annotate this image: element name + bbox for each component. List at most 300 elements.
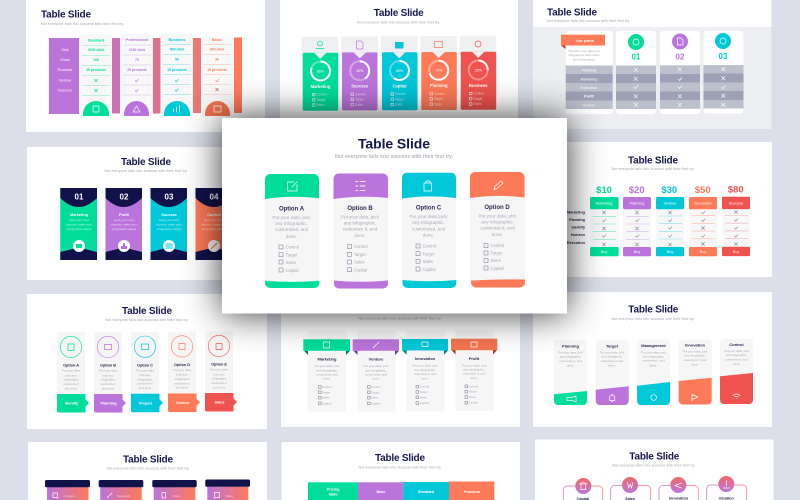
option c card: Sales	[422, 259, 433, 264]
column: business: Control	[474, 92, 484, 96]
card: venture: Control	[371, 385, 381, 389]
option c card: customized, and	[412, 226, 446, 231]
subtitle: Not everyone falls into success with their first try.	[547, 19, 630, 23]
subtitle: Not everyone falls into success with their first try.	[41, 22, 124, 26]
plans card: Planning	[582, 68, 596, 72]
column 3: Data	[173, 494, 180, 498]
card 02	[106, 188, 142, 260]
option c card: any infographic,	[412, 220, 445, 225]
plan: professional: 20 products	[127, 68, 147, 72]
card 04: Apply your best	[204, 218, 225, 222]
option b: and done	[102, 386, 115, 390]
subtitle: Not everyone falls into success with their first try.	[612, 317, 695, 321]
option e: pick any	[213, 372, 225, 376]
option c card: Target	[422, 251, 435, 256]
column: $50	[689, 185, 717, 256]
column 2	[99, 480, 143, 500]
header: standard: Standard	[418, 490, 435, 494]
card: target: Put your data, pick	[600, 351, 625, 355]
column: success: Control	[355, 92, 366, 96]
plan: business: 15 products	[167, 68, 187, 72]
row label column: Venture	[59, 78, 71, 82]
card: planning: Planning	[562, 344, 580, 348]
card: innovation: Sales	[420, 395, 428, 399]
card 03: infographic unique	[157, 227, 182, 231]
card 04: 04	[210, 192, 219, 202]
column 4	[205, 480, 250, 500]
option a card: Sales	[286, 260, 296, 265]
column: $20: Planning	[630, 202, 644, 206]
row label column: Email	[60, 58, 70, 62]
option d: pick any	[176, 373, 188, 377]
option a: Put your data	[62, 369, 80, 373]
plan: professional	[121, 34, 153, 116]
card: management: done.	[650, 363, 657, 367]
card: management: Management	[641, 343, 666, 348]
card 04: infographic unique	[202, 227, 227, 231]
column: planning: Control	[434, 92, 445, 96]
option d: customize it	[174, 381, 190, 385]
option a card: Capital	[286, 268, 299, 273]
option c card: Put your data, pick	[409, 214, 448, 219]
option c card	[402, 173, 456, 288]
card: marketing: any infographic,	[316, 368, 338, 372]
panel: gradient rows slide, bottom left	[28, 442, 267, 500]
option a card: customized, and	[275, 227, 309, 232]
column: $80	[722, 184, 750, 256]
card 03: Success	[161, 213, 177, 217]
option a card: Target	[286, 252, 298, 257]
header: premium	[449, 482, 494, 500]
panel: our plans slide, top right	[533, 0, 772, 129]
column: capital: Sales	[395, 103, 403, 107]
option d card: Target	[490, 250, 503, 256]
option d card: Capital	[490, 266, 504, 271]
card: ideation	[707, 476, 747, 500]
card: marketing: Sales	[322, 396, 330, 400]
option a: customize it	[63, 382, 79, 386]
column: capital: 60%	[396, 69, 404, 73]
plan: professional: Professional	[126, 38, 148, 42]
panel: pricing header slide, bottom centre	[282, 442, 520, 500]
card: capital	[563, 478, 603, 500]
connecting bars	[112, 38, 242, 114]
title: Table Slide	[122, 306, 172, 317]
column 2: Research	[117, 494, 130, 498]
card 02: skyeicto make your	[111, 222, 137, 226]
option a	[57, 332, 89, 412]
plan: business	[161, 34, 193, 116]
option b card	[334, 174, 388, 288]
plan: basic: 30	[215, 58, 219, 62]
option a: infographic	[64, 378, 79, 382]
option a card: Option A	[279, 206, 305, 212]
plan 02: 02	[676, 52, 685, 61]
option d: Put your data	[173, 368, 191, 372]
column: $20: Buy	[634, 250, 640, 254]
title: Table Slide	[628, 305, 679, 316]
card: profit: Control	[468, 384, 479, 388]
option c: Put your data	[136, 368, 154, 372]
option d card	[470, 172, 525, 288]
title: Table Slide	[375, 453, 425, 464]
plan: standard: 30 products	[86, 68, 106, 72]
option c card: Control	[422, 244, 436, 248]
column: marketing: Marketing	[311, 84, 331, 89]
title: Table Slide	[375, 304, 425, 316]
row label column	[49, 38, 79, 114]
option e: Sales	[215, 400, 224, 404]
card: marketing	[303, 330, 350, 412]
card: management: Put your data, pick	[641, 350, 666, 354]
column: $10: Buy	[601, 250, 607, 254]
card: planning: customize it, and	[559, 359, 582, 363]
option b: Planning	[100, 402, 117, 406]
option d card: any infographic,	[481, 220, 514, 224]
option d: infographic	[175, 377, 190, 381]
option c: customize it	[137, 382, 153, 386]
plan 02	[660, 31, 700, 114]
card 01: Apply your best	[69, 218, 90, 222]
column: success: Target	[355, 98, 364, 102]
plan: professional: 1000 click	[129, 48, 145, 52]
card: innovation: Control	[420, 385, 430, 389]
card: marketing: done.	[323, 377, 331, 381]
row labels: Planning	[569, 218, 586, 222]
plan: business: Business	[169, 38, 185, 42]
column 3	[152, 480, 197, 500]
subtitle: Not everyone falls into success with their first try.	[358, 466, 442, 470]
option c card: done.	[423, 233, 434, 238]
column: $50: $50	[695, 185, 711, 196]
card: profit: Sales	[468, 395, 477, 399]
title: Table Slide	[374, 8, 424, 19]
subtitle: Not everyone falls into success with their first try.	[357, 20, 440, 24]
card: marketing: Capital	[322, 401, 332, 405]
option a card: Put your data, pick	[272, 215, 311, 220]
column: success: Sales	[355, 103, 363, 107]
card: innovation: Capital	[420, 401, 429, 405]
plans card: Marketing	[581, 77, 597, 81]
card 01: Marketing	[70, 213, 89, 217]
header: standard	[403, 482, 449, 500]
column: planning	[420, 36, 457, 110]
card: venture: Capital	[371, 401, 381, 405]
card: marketing: customized, and	[316, 372, 338, 376]
card 01: skyeicto make your	[66, 222, 92, 226]
plan: standard: Standard	[88, 38, 105, 42]
row labels: Marketing	[567, 210, 586, 214]
header: pricing table	[308, 482, 358, 500]
option c card: Option C	[416, 205, 442, 211]
card 02: infographic unique	[112, 227, 137, 231]
panel: progress rings slide, top centre	[280, 0, 518, 118]
panel: pricing table slide, middle right	[533, 142, 772, 277]
plan: professional: 75	[135, 58, 139, 62]
plans card: Our plans	[576, 39, 594, 43]
column: capital	[381, 36, 418, 110]
option b card: Control	[354, 244, 368, 249]
option b: Option B	[100, 364, 116, 368]
column 1	[45, 480, 90, 500]
column: $30: $30	[661, 185, 677, 196]
option c: Project	[139, 401, 153, 405]
option b card: Option B	[347, 206, 373, 212]
plan 01	[616, 31, 656, 114]
option e	[205, 331, 237, 412]
option e: Put your data	[210, 368, 228, 372]
row labels: Execution	[567, 241, 586, 245]
card: target: done.	[608, 364, 616, 368]
column: $80: Buy	[733, 250, 739, 254]
option e: infographic	[212, 377, 227, 381]
column: success: Success	[351, 84, 369, 89]
card: innovation: Innovation	[415, 356, 436, 361]
subtitle: Not everyone falls into success with their first try.	[106, 318, 189, 322]
panel: slanted footer slide, lower right	[533, 292, 772, 427]
title: Table Slide	[547, 8, 597, 18]
card: profit: Capital	[468, 401, 478, 405]
column: business: Target	[474, 97, 482, 101]
plan 03: 03	[719, 52, 728, 61]
subtitle: Not everyone falls into success with their first try.	[358, 316, 442, 320]
card: innovation: customize it, and	[684, 358, 707, 362]
card: control: Put your data, pick	[724, 349, 749, 353]
header: pricing table: table	[329, 492, 337, 496]
option d: and done	[176, 386, 189, 390]
column: planning: Sales	[434, 102, 442, 106]
plans card: Venture	[582, 104, 596, 108]
card 02: Apply your best	[114, 218, 135, 222]
card: innovation: Put your data, pick	[683, 350, 708, 354]
plans card	[561, 31, 613, 114]
option c: and done	[139, 386, 152, 390]
card 03	[150, 188, 187, 260]
card: profit	[451, 329, 497, 411]
plan: standard: 2000 click	[88, 48, 104, 52]
card: venture: customized, and	[365, 372, 387, 376]
card: innovation: customize it, and	[414, 372, 437, 376]
column 1: Venture	[64, 494, 75, 498]
option e: and done	[213, 385, 226, 389]
option b: infographic	[101, 378, 116, 382]
card: venture: Sales	[371, 396, 379, 400]
subtitle: Not everyone falls into success with their first try.	[612, 464, 696, 468]
option a: Identify	[65, 402, 79, 406]
row labels	[567, 210, 586, 245]
column: capital: Capital	[393, 83, 406, 88]
card: profit: Target	[468, 390, 477, 394]
card: control: done.	[733, 362, 740, 366]
column: marketing: Sales	[316, 103, 325, 107]
plan 03	[704, 31, 744, 114]
column: success	[341, 36, 378, 110]
column: planning: Planning	[430, 83, 448, 88]
column: planning: Target	[434, 97, 443, 101]
column: capital: Target	[395, 97, 404, 101]
card: venture	[353, 330, 399, 412]
option e: Option E	[211, 363, 227, 367]
card: profit: any infographic,	[463, 368, 485, 372]
option a card	[265, 174, 319, 288]
plan: standard: 100	[93, 58, 99, 62]
row label column: Disk	[62, 48, 69, 52]
column: $10: Marketing	[596, 202, 612, 206]
card 01: 01	[75, 192, 84, 202]
header: premium: Premium	[464, 490, 481, 494]
subtitle: Not everyone falls into success with their first try.	[106, 466, 190, 470]
option d card: Option D	[484, 205, 510, 211]
option a card: done.	[286, 234, 297, 239]
plan 01: 01	[632, 52, 641, 62]
option b card: Put your data, pick	[341, 214, 380, 219]
option d card: customize it, and	[480, 226, 515, 231]
card: management: any infographic,	[643, 354, 664, 358]
column: $80: $80	[728, 184, 744, 196]
card: target: Target	[606, 344, 619, 348]
column 4: Sales	[226, 494, 234, 498]
option d: Control	[176, 401, 189, 405]
column: $10: $10	[596, 185, 612, 196]
column: marketing	[302, 37, 338, 111]
card: venture: Target	[371, 390, 380, 394]
column: $30: Venture	[663, 202, 677, 206]
title: Table Slide	[121, 157, 171, 168]
card: management	[637, 340, 670, 405]
card: target: any infographic,	[601, 355, 623, 359]
option b card: any infographic,	[344, 220, 376, 226]
plan: standard	[80, 34, 112, 116]
option a: pick any	[65, 373, 77, 377]
column: $20: $20	[629, 185, 645, 196]
option c: Option C	[137, 363, 153, 367]
subtitle: Not everyone falls into success with their first try.	[104, 169, 188, 173]
card: innovation	[402, 330, 448, 411]
card 03: 03	[165, 192, 174, 202]
card: target	[596, 340, 629, 405]
option c	[131, 332, 163, 412]
option d card: done.	[492, 232, 503, 237]
column: $30	[656, 185, 684, 256]
panel: ribbon cards slide, lower centre	[281, 294, 520, 427]
card: profit: Profit	[469, 356, 480, 361]
card: sales	[611, 477, 651, 500]
option d	[168, 332, 200, 412]
option d card: Control	[490, 243, 504, 248]
card: marketing: Put your data, pick	[315, 364, 340, 368]
card 01: infographic unique	[67, 227, 92, 231]
column: $80: Success	[729, 201, 743, 205]
panel: featured table slide, centre	[222, 118, 567, 314]
column: business: Sales	[474, 102, 482, 106]
panel: numbered cards slide, middle left	[27, 147, 267, 280]
card: marketing: Target	[322, 390, 331, 394]
plans card: Visualize your data and	[568, 49, 600, 53]
card: innovation	[659, 477, 698, 500]
header: base: Base	[376, 490, 386, 494]
option b: Put your data	[99, 369, 117, 373]
card: venture: Put your data, pick	[364, 364, 389, 368]
option b	[94, 332, 126, 412]
card: planning: any infographic,	[560, 355, 581, 359]
option c: infographic	[138, 377, 153, 381]
card: control: Control	[729, 342, 744, 347]
option a card: Control	[286, 244, 299, 250]
card: innovation: Target	[420, 390, 428, 394]
option b: customize it	[100, 382, 116, 386]
option e: customize it	[211, 381, 227, 385]
card: innovation	[679, 340, 712, 404]
card: profit: Put your data, pick	[462, 363, 487, 367]
option b card: Capital	[354, 268, 367, 272]
option b card: Sales	[354, 260, 364, 265]
card: control: any infographic,	[726, 353, 747, 357]
plan: business: 50	[175, 58, 179, 62]
card: venture: any infographic,	[365, 368, 387, 372]
plan: business: 500 click	[170, 48, 184, 52]
option a: and done	[65, 386, 78, 390]
card: innovation: Innovation	[685, 342, 706, 348]
column: $20	[623, 185, 651, 256]
column: $30: Buy	[667, 250, 673, 254]
card 04: skyeicto make your	[201, 222, 227, 226]
title: Table Slide	[629, 452, 680, 462]
plans card: infographics with charts	[568, 53, 600, 57]
card: target: customize it, and	[601, 359, 624, 363]
plan: basic: Basic	[212, 38, 222, 42]
plans card: Execution	[581, 86, 597, 90]
card: innovation: Put your data, pick	[413, 364, 438, 368]
plan: basic: 300 click	[210, 48, 224, 52]
option a: Option A	[63, 364, 79, 368]
panel: arrow tags slide, lower left	[27, 294, 267, 429]
row label column: Products	[58, 68, 72, 72]
plans card: Profit	[584, 95, 595, 99]
card 04	[196, 188, 232, 260]
card 03: skyeicto make your	[156, 222, 182, 226]
subtitle: Not everyone falls into success with their first try.	[612, 167, 695, 171]
option b card: Target	[354, 252, 366, 257]
column: marketing: 80%	[317, 69, 325, 73]
row labels: Horizon	[571, 233, 586, 237]
option b card: customize it, and	[343, 227, 378, 232]
card: control: customize it, and	[725, 358, 748, 362]
card: innovation: any infographic,	[684, 354, 706, 358]
card: profit: customize it, and	[463, 372, 486, 376]
option d: Option D	[174, 363, 190, 367]
plan: basic	[201, 36, 233, 116]
option c card: Capital	[422, 267, 436, 272]
column: marketing: Control	[316, 93, 327, 97]
panel: circle icon cards slide, bottom right	[535, 440, 774, 500]
title: Table Slide	[358, 136, 430, 152]
header: base	[358, 482, 403, 500]
card: planning: Put your data, pick	[558, 351, 583, 355]
option a card: any infographic,	[275, 221, 308, 226]
subtitle: Not everyone falls into success with their first try.	[335, 154, 453, 160]
option c: pick any	[139, 373, 151, 377]
card: profit: done.	[470, 376, 478, 380]
column: marketing: Target	[316, 98, 325, 102]
card: innovation: done.	[691, 363, 699, 367]
column: capital: Control	[395, 92, 406, 96]
column: $50: Innovation	[694, 202, 712, 206]
panel: pricing comparison slide, top left	[26, 0, 265, 132]
card: venture: Venture	[369, 356, 384, 362]
card 03: Apply your best	[159, 218, 180, 222]
centre slide shadow	[222, 118, 567, 314]
card: control	[720, 339, 753, 404]
